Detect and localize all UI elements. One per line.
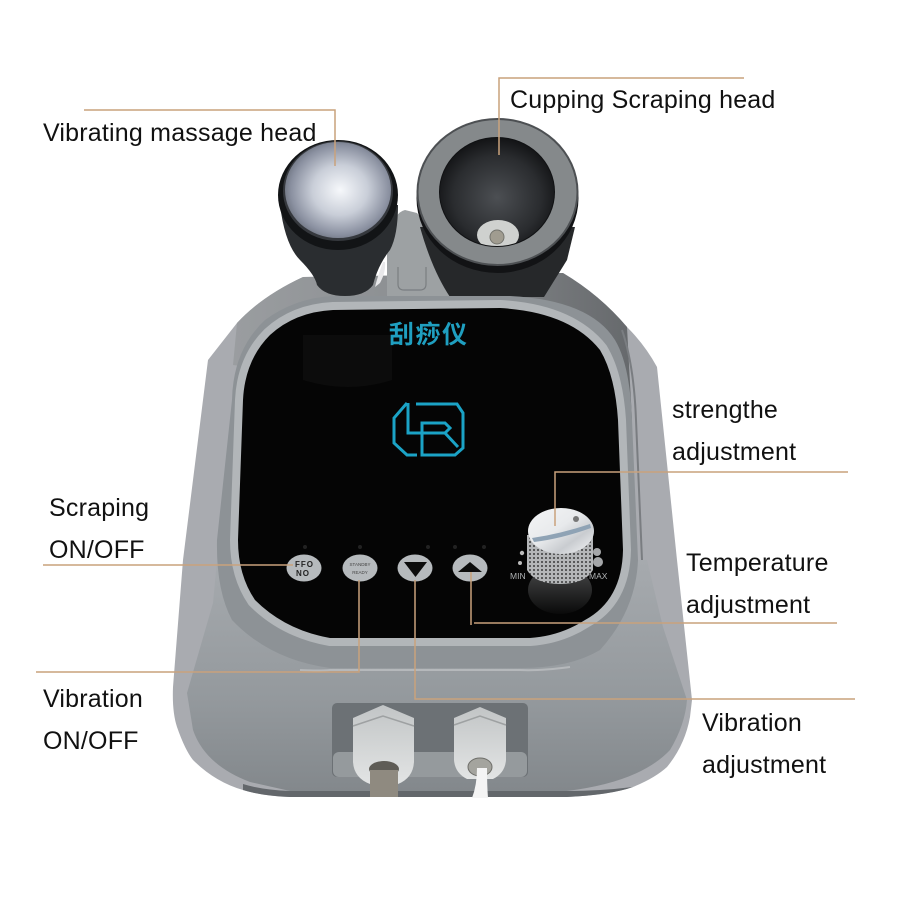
label: scraping on/off <box>43 494 293 565</box>
neck mount between heads <box>387 210 455 296</box>
button: scraping on/off: FFO <box>295 560 314 569</box>
button: vibration on/off: STANDBY <box>350 562 370 567</box>
label: vibration on/off: ON/OFF <box>43 727 139 755</box>
label: vibration on/off <box>36 580 359 755</box>
button: vibration on/off <box>342 554 378 582</box>
knob with min max scale: MAX <box>589 571 608 581</box>
label: vibrating massage head <box>43 110 335 166</box>
label: strength adjustment: adjustment <box>672 438 796 466</box>
button: up arrow <box>452 554 488 582</box>
label: vibration adjustment: Vibration <box>702 709 802 737</box>
label: vibrating massage head: Vibrating massage head <box>43 119 317 147</box>
label: vibration on/off: Vibration <box>43 685 143 713</box>
label: temperature adjustment: Temperature <box>686 549 829 577</box>
right cable and gland <box>454 707 506 798</box>
label: strength adjustment: strengthe <box>672 396 778 424</box>
label: temperature adjustment <box>471 549 837 625</box>
label: cupping scraping head <box>499 78 776 155</box>
vibrating massage head <box>278 140 398 296</box>
label: cupping scraping head: Cupping Scraping head <box>510 86 776 114</box>
cable port recess <box>332 703 528 777</box>
button: scraping on/off: NO <box>296 569 310 578</box>
button: scraping on/off <box>286 554 322 582</box>
device body <box>173 273 692 797</box>
label: vibration adjustment <box>415 580 855 779</box>
button: down arrow <box>398 554 432 582</box>
left cable and gland <box>353 705 414 797</box>
label: strength adjustment <box>555 396 848 526</box>
label: scraping on/off: ON/OFF <box>49 536 145 564</box>
label: scraping on/off: Scraping <box>49 494 149 522</box>
label: temperature adjustment: adjustment <box>686 591 810 619</box>
cupping scraping head <box>416 118 578 297</box>
screen bezel <box>217 296 638 670</box>
indicator lights <box>303 545 486 549</box>
label: vibration adjustment: adjustment <box>702 751 826 779</box>
panel title: 刮痧仪 <box>389 321 469 349</box>
knob with min max scale <box>510 508 608 614</box>
black control panel <box>238 308 623 638</box>
button: vibration on/off: READY <box>352 570 368 575</box>
LR logo <box>394 403 463 455</box>
knob with min max scale: MIN <box>510 571 526 581</box>
